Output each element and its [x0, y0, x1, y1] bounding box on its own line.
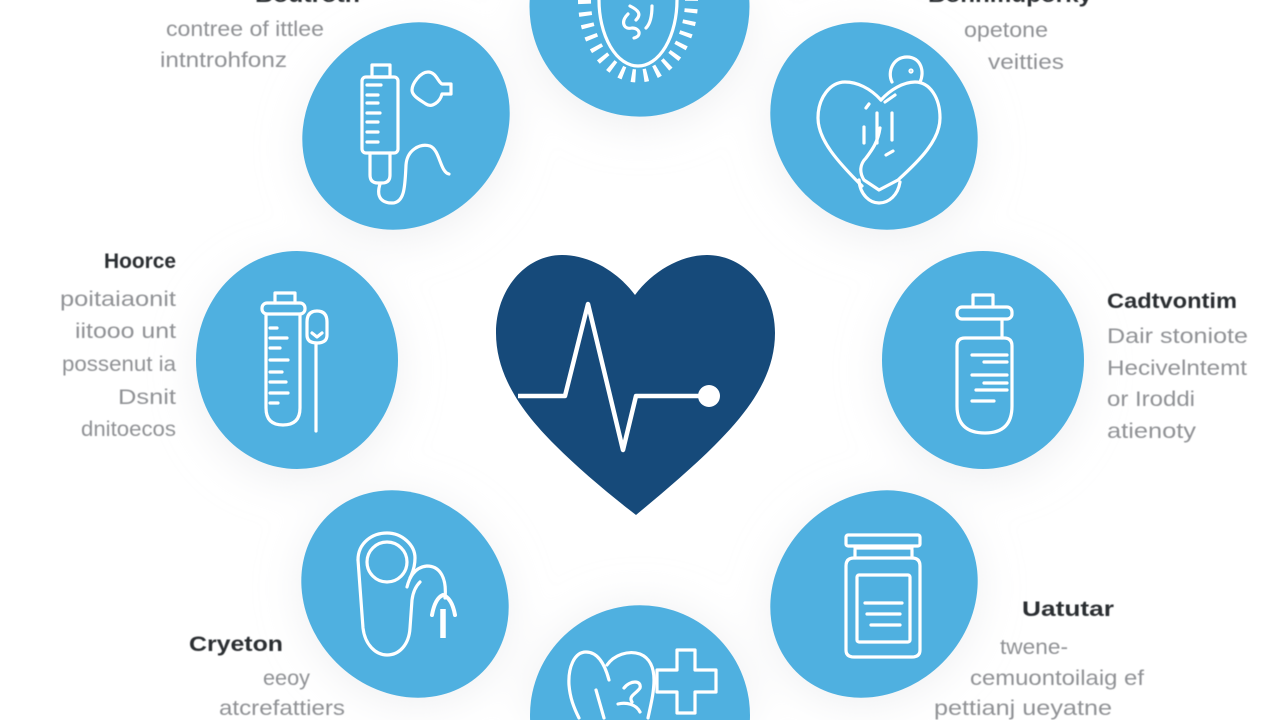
text block: lower-right: cemuontoilaig ef: [970, 667, 1144, 690]
icon: radial cell: [584, 0, 692, 76]
panel: lower-right circle with jar: [728, 448, 1020, 720]
text block: left: poitaiaonit: [60, 288, 176, 311]
text block: right: or Iroddi: [1107, 388, 1195, 411]
text block: left: [60, 250, 176, 441]
text block: left: dnitoecos: [81, 418, 176, 441]
text block: lower-left: atcrefattiers: [219, 697, 345, 720]
icon: capsule device with arrow: [358, 533, 455, 655]
heading: lower-left: Cryeton: [189, 633, 283, 656]
panel: upper-right circle with heart icon: [728, 0, 1020, 272]
text block: right: Hecivelntemt: [1107, 357, 1247, 380]
text block: upper-right: opetone: [964, 19, 1048, 42]
icon: heart and bulb: [818, 57, 940, 203]
icon: test tube and swab: [262, 293, 327, 431]
text block: upper-left: [160, 0, 360, 72]
panel: bottom circle with organ and cross: [530, 605, 750, 720]
panel: upper-left circle with syringe: [260, 0, 552, 272]
text block: upper-right: veitties: [988, 51, 1064, 74]
text block: lower-left: [189, 633, 345, 720]
text block: lower-right: twene-: [1000, 636, 1068, 659]
text block: lower-right: [934, 598, 1144, 720]
icon: bottle: [957, 295, 1012, 433]
panel: right circle with bottle: [882, 251, 1084, 469]
icon: jar with label: [846, 535, 920, 657]
text block: left: possenut ia: [62, 353, 176, 376]
panel: lower-left circle with device: [259, 448, 551, 720]
text block: left: iitooo unt: [75, 320, 176, 343]
text block: upper-left: contree of ittlee: [166, 18, 324, 41]
text block: upper-left: intntrohfonz: [160, 49, 287, 72]
central heart with ECG line: [496, 255, 775, 515]
text block: upper-right: [928, 0, 1092, 74]
icon: syringe and tube: [362, 65, 451, 203]
heading: right: Cadtvontim: [1107, 290, 1237, 313]
icon: organ and plus: [569, 650, 716, 718]
panel: left circle with test tube: [196, 251, 398, 469]
text block: lower-right: pettianj ueyatne: [934, 697, 1112, 720]
text block: right: atienoty: [1107, 420, 1197, 443]
text block: lower-left: eeoy: [263, 667, 311, 690]
text block: left: Dsnit: [118, 386, 176, 409]
text block: right: [1107, 290, 1248, 443]
text block: right: Dair stoniote: [1107, 325, 1248, 348]
heading: lower-right: Uatutar: [1022, 598, 1114, 621]
heading: left: Hoorce: [104, 250, 176, 273]
panel: top circle with radial cell icon: [529, 0, 750, 117]
